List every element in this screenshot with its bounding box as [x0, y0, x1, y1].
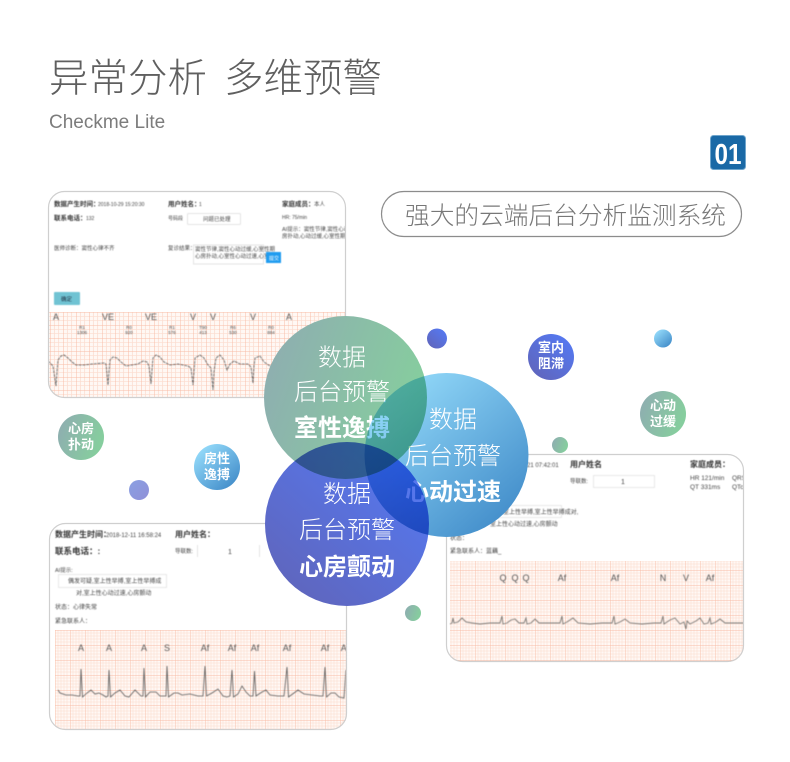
beat labels	[78, 644, 346, 652]
report text: 问题已处理	[203, 215, 231, 223]
title second part: 多维预警	[224, 57, 382, 101]
beat labels: Af	[201, 643, 210, 653]
report text: 1	[621, 479, 625, 486]
report text: HR 121/min	[690, 475, 725, 482]
bubble: 室内阻滞: 室内	[538, 340, 564, 355]
beat labels: R1	[169, 325, 175, 330]
small bubble: lavender dot	[129, 480, 149, 500]
beat labels: VE	[145, 312, 157, 322]
pill heading: 强大的云端后台分析监测系统	[405, 202, 726, 230]
beat labels: Af	[611, 573, 620, 583]
large circle: 室性逸搏: 数据	[318, 344, 366, 372]
beat labels: V	[250, 312, 256, 322]
report text: 1	[199, 202, 202, 208]
beat labels: V	[210, 312, 216, 322]
report text: 导联数:	[570, 477, 589, 485]
beat labels: Q	[511, 573, 519, 583]
large circle: 室性逸搏: 室性逸搏	[294, 414, 390, 442]
report text: 紧急联系人：	[55, 617, 91, 625]
report text: 2018-10-29 15:20:30	[98, 202, 145, 208]
report text: 用户姓名：	[168, 199, 200, 208]
large circle: 室性逸搏	[264, 316, 427, 479]
report text: 号码段	[168, 215, 183, 222]
small bubble: light blue dot	[654, 330, 672, 348]
report text: 紧急联系人：蓝藕_	[450, 547, 502, 555]
large circle: 心动过速: 数据	[429, 406, 477, 434]
report text: 联系电话：	[54, 213, 86, 222]
beat labels: A	[286, 312, 292, 322]
beat labels: Af	[706, 573, 715, 583]
panel: ECG report right	[446, 454, 747, 662]
report text: 用户姓名：	[175, 529, 215, 539]
bubble: 心动过缓: 心动	[650, 398, 676, 413]
beat labels: R0	[268, 325, 274, 330]
report text: 复诊结果：	[168, 244, 196, 252]
small bubble: indigo dot	[427, 328, 447, 348]
report text: 窦性节律,窦性心动过缓,心室性期	[195, 245, 276, 253]
ECG grid	[48, 312, 346, 398]
report text: 心房扑动,心室性心动过速,心室	[195, 252, 270, 260]
report text: AI提示:	[55, 566, 73, 574]
report text: QTc	[732, 484, 744, 491]
report text: 状态：	[450, 534, 468, 542]
large circle: 心房颤动: 后台预警	[299, 517, 395, 544]
beat labels: V	[683, 573, 689, 583]
ECG grid	[55, 630, 347, 730]
report text: 数据产生时间：	[54, 199, 100, 208]
title: 异常分析	[49, 57, 207, 101]
large circle: 心动过速: 后台预警	[405, 443, 501, 470]
ECG trace	[450, 616, 744, 629]
bubble: 房性逸搏: 逸搏	[204, 467, 230, 482]
beat labels: Af	[251, 643, 260, 653]
report text: QRS	[732, 475, 747, 482]
beat labels: 576	[168, 330, 176, 335]
bubble: 房性逸搏: 房性	[204, 451, 230, 466]
beat labels: R6	[230, 325, 236, 330]
report text: 132	[86, 216, 95, 222]
beat labels: Q	[522, 573, 530, 583]
subtitle: Checkme Lite	[49, 112, 165, 133]
report text: 导联数:	[175, 547, 194, 555]
beat labels: A	[141, 643, 147, 653]
beat labels	[53, 312, 292, 335]
large circle: 室性逸搏: 后台预警	[294, 379, 390, 406]
large circle backing	[264, 316, 528, 606]
panel: ECG report top left	[48, 191, 368, 398]
large circle: 心房颤动: 心房颤动	[299, 554, 395, 581]
beat labels: Q	[499, 573, 507, 583]
ECG trace	[58, 666, 346, 698]
beat labels: 884	[267, 330, 275, 335]
large circle: 心房颤动: 数据	[323, 481, 371, 508]
beat labels: 1306	[77, 330, 88, 335]
report text	[450, 459, 747, 555]
beat labels: Af	[283, 643, 292, 653]
bubble: 心房扑动: 扑动	[68, 437, 94, 452]
panel: ECG report bottom left	[49, 523, 350, 730]
report text: 联系电话：:	[55, 546, 101, 556]
beat labels: R0	[126, 325, 132, 330]
report text: HR: 75/min	[282, 215, 307, 221]
report text: 1	[228, 549, 232, 556]
report text: 用户姓名	[570, 459, 602, 469]
bubble: 室内阻滞	[528, 334, 574, 380]
beat labels: N	[660, 573, 666, 583]
beat labels	[499, 573, 715, 583]
report text: 状态：心律失常	[55, 603, 97, 611]
beat labels: S	[164, 643, 170, 653]
beat labels: 920	[125, 330, 133, 335]
beat labels: A	[106, 643, 112, 653]
bubble: 心房扑动: 心房	[68, 421, 94, 436]
report text: 提交	[269, 255, 279, 262]
beat labels: Af	[321, 643, 330, 653]
beat labels: R1	[79, 325, 85, 330]
beat labels: A	[53, 312, 59, 322]
beat labels: VE	[102, 312, 114, 322]
report text: 数据产生时间：	[55, 529, 111, 539]
bubble: 心动过缓	[640, 391, 686, 437]
badge: 01: 01	[714, 139, 742, 171]
bubble: 心房扑动	[58, 414, 104, 460]
beat labels: Af	[341, 643, 350, 653]
beat labels: Af	[228, 643, 237, 653]
beat labels: 530	[229, 330, 237, 335]
pill heading	[382, 192, 742, 236]
report text: 偶发可疑,室上性早搏,室上性早搏成	[68, 577, 161, 585]
report text: 对,室上性心动过速,心房颤动	[76, 589, 151, 597]
report text: 确定	[61, 295, 73, 303]
ECG trace	[48, 355, 280, 390]
report text: QT 331ms	[690, 484, 721, 491]
ECG grid	[450, 561, 744, 662]
report text: 家庭成员：	[690, 459, 730, 469]
report text: AI提示：窦性节律,窦性心动过缓,心	[282, 225, 368, 233]
report text: 房扑动,心动过缓,心室性期前收缩	[282, 232, 363, 240]
beat labels: V	[190, 312, 196, 322]
small bubble: green dot bottom	[405, 605, 421, 621]
small bubble: green dot right	[552, 437, 568, 453]
report text: 医师诊断：窦性心律不齐	[54, 244, 115, 252]
report text: 室上性早搏,室上性早搏成对,	[503, 508, 579, 516]
large circle: 心动过速: 心动过速	[405, 479, 501, 506]
report text	[54, 199, 368, 305]
bubble: 心动过缓: 过缓	[650, 414, 676, 429]
beat labels: T90	[199, 325, 207, 330]
report text: 室上性心动过速,心房颤动	[490, 520, 558, 528]
report text	[55, 529, 260, 625]
beat labels: 413	[199, 330, 207, 335]
report text: 2018-12-11 16:58:24	[106, 533, 162, 539]
beat labels: A	[78, 643, 84, 653]
report text: 21 07:42:01	[527, 463, 559, 469]
beat labels: Af	[558, 573, 567, 583]
large circle: 心房颤动	[265, 442, 429, 606]
bubble: 房性逸搏	[194, 444, 240, 490]
large circle: 心动过速	[364, 373, 528, 537]
report text: 家庭成员：	[282, 199, 314, 208]
report text: 本人	[314, 200, 326, 208]
bubble: 室内阻滞: 阻滞	[538, 356, 564, 371]
